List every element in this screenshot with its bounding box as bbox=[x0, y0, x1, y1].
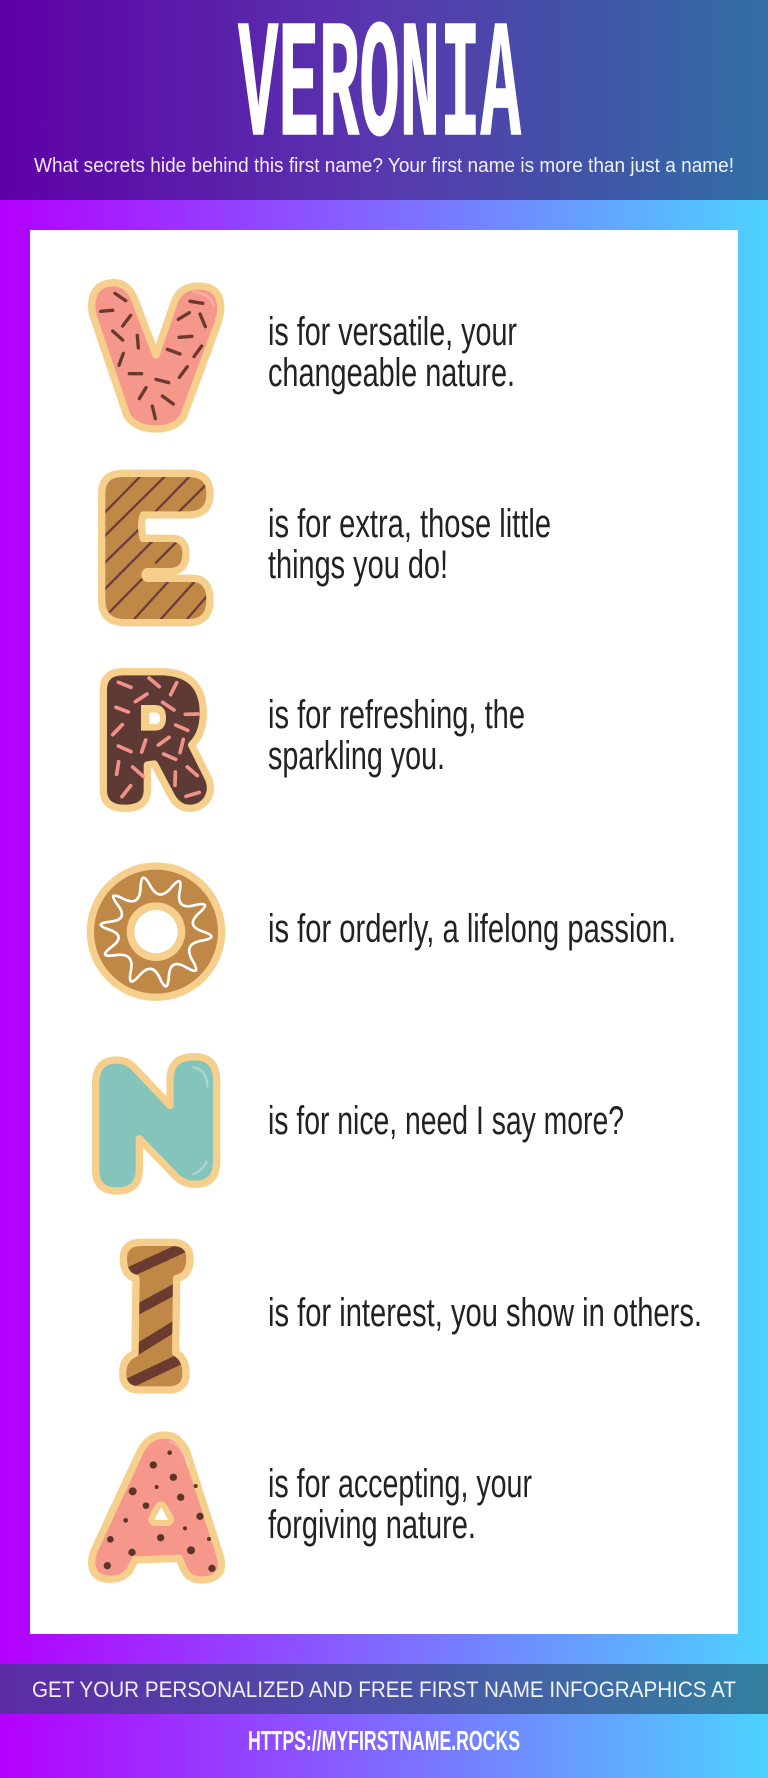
text: E: things you do! bbox=[268, 543, 448, 587]
text: A: is for accepting, your bbox=[268, 1462, 532, 1506]
text: V: is for versatile, your bbox=[268, 310, 517, 354]
text: N: is for nice, need I say more? bbox=[268, 1099, 624, 1143]
icon: O donut cookie bbox=[87, 862, 225, 1001]
footer url: HTTPS://MYFIRSTNAME.ROCKS bbox=[248, 1725, 520, 1756]
header band bbox=[0, 0, 768, 200]
text: V: changeable nature. bbox=[268, 351, 515, 395]
white content panel bbox=[30, 230, 738, 1634]
icon: V cookie with sprinkles bbox=[92, 283, 221, 429]
text: E bbox=[268, 502, 551, 587]
icon: E cookie with stripes bbox=[102, 473, 210, 623]
subtitle: What secrets hide behind this first name? Your first name is more than just a name! bbox=[34, 155, 734, 177]
icon: R cookie with sprinkles bbox=[103, 672, 210, 808]
icon: A cookie with dots bbox=[92, 1435, 222, 1580]
text: R: sparkling you. bbox=[268, 734, 445, 778]
footer band bbox=[0, 1664, 768, 1714]
text: R bbox=[268, 693, 525, 778]
icon: I cookie with stripes bbox=[123, 1242, 190, 1390]
icon: N cookie bbox=[96, 1057, 217, 1191]
text: E: is for extra, those little bbox=[268, 502, 551, 546]
text: A bbox=[268, 1462, 532, 1547]
text: A: forgiving nature. bbox=[268, 1503, 476, 1547]
footer text: GET YOUR PERSONALIZED AND FREE FIRST NAME INFOGRAPHICS AT bbox=[32, 1677, 736, 1702]
text: V bbox=[268, 310, 517, 395]
text: R: is for refreshing, the bbox=[268, 693, 525, 737]
